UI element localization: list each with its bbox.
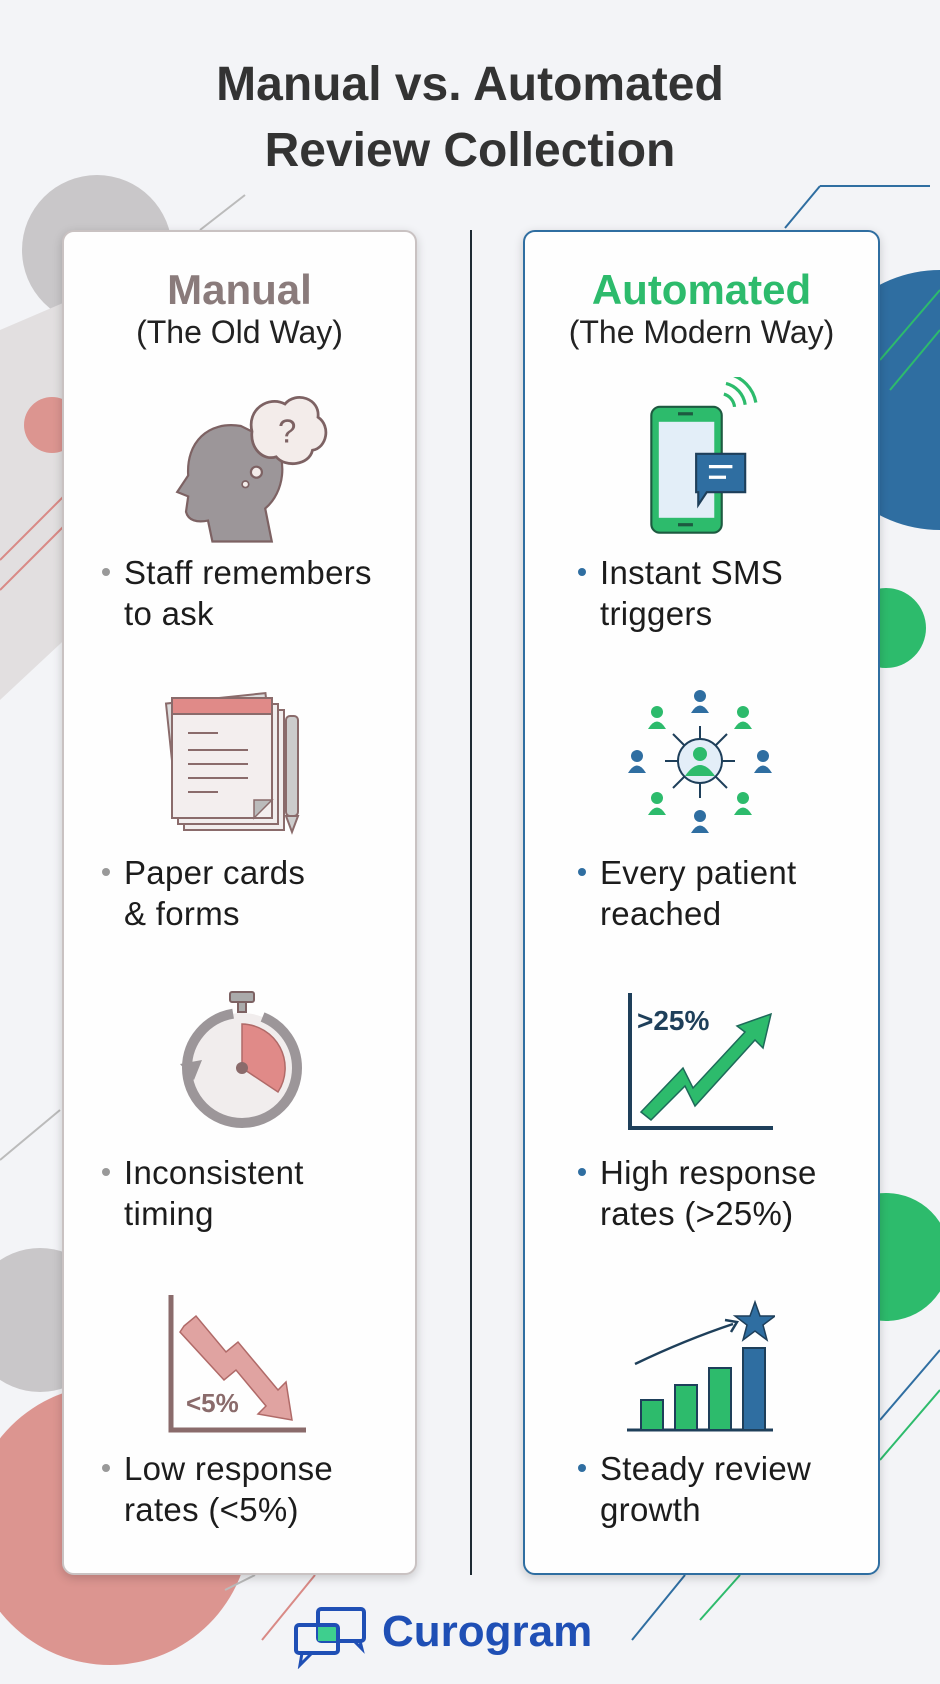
text: steady growth [578,1450,811,1528]
text: paper cards: Paper cards [124,854,305,891]
subheading: modern way: (The Modern Way) [569,314,834,350]
text: instant sms [578,554,783,632]
text: staff remembers: to ask [124,595,214,632]
text: steady growth: Steady review [600,1450,811,1487]
icon: rising chart: >25% [637,1005,709,1036]
heading: automated: Automated [592,266,811,313]
text: every patient [578,854,797,932]
text: low response: Low response [124,1450,333,1487]
text: low response [102,1450,333,1528]
text: high response [578,1154,817,1232]
icon: stopwatch [180,991,302,1128]
text: every patient: Every patient [600,854,797,891]
title [216,58,724,177]
icon: growth bars with star [627,1300,775,1432]
text: low response: rates (<5%) [124,1491,299,1528]
icon: declining chart [168,1295,306,1432]
icon: rising chart [628,993,773,1130]
text: inconsistent timing [102,1154,304,1232]
title: Review Collection [265,124,675,177]
text: instant sms: triggers [600,595,712,632]
text: high response: rates (>25%) [600,1195,793,1232]
text: inconsistent timing: Inconsistent [124,1154,304,1191]
icon: chat bubbles [294,1607,366,1669]
text: steady growth: growth [600,1491,701,1528]
text: paper cards [102,854,305,932]
title: Manual vs. Automated [216,58,724,111]
panel: automated [523,230,880,1575]
icon: phone with sms [650,377,758,534]
text: every patient: reached [600,895,721,932]
text: high response: High response [600,1154,817,1191]
icon: head with question [176,396,328,543]
text: inconsistent timing: timing [124,1195,214,1232]
heading: manual: Manual [167,266,312,313]
subheading: old way: (The Old Way) [136,314,343,350]
text: staff remembers: Staff remembers [124,554,372,591]
text: curogram: Curogram [382,1607,592,1656]
icon: head with question: ? [278,412,296,449]
logo: curogram [294,1607,592,1669]
icon: declining chart: <5% [186,1388,239,1418]
text: staff remembers [102,554,372,632]
panel: manual [62,230,417,1575]
icon: paper forms [164,692,300,835]
text: instant sms: Instant SMS [600,554,783,591]
text: paper cards: & forms [124,895,240,932]
icon: network of patients [628,690,772,833]
